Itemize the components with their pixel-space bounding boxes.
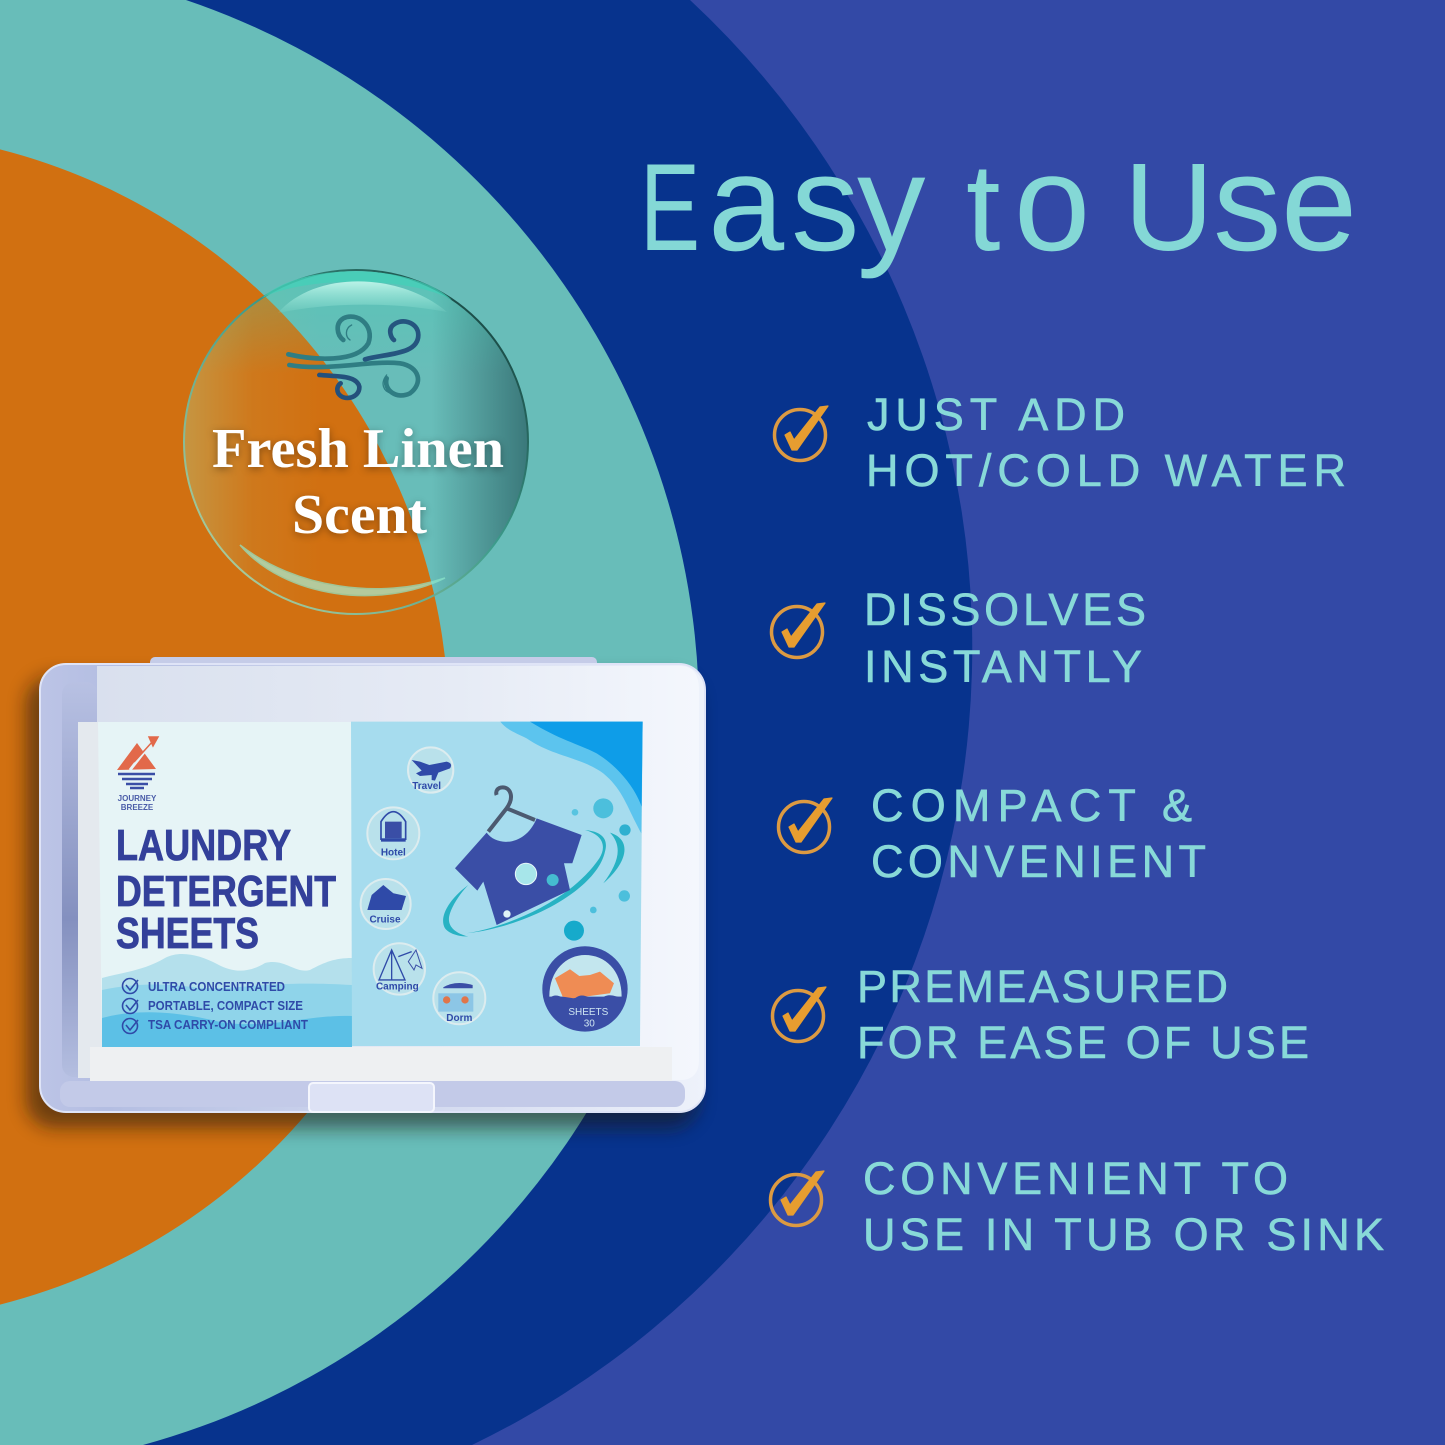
icon: travel	[408, 747, 453, 793]
item text: CONVENIENT	[871, 836, 1206, 887]
product name: DETERGENT	[116, 867, 336, 916]
badge text	[212, 418, 504, 546]
case bottom edge	[60, 1081, 685, 1107]
title: o	[1014, 127, 1090, 280]
case shell	[40, 664, 705, 1112]
brand logo: BREEZE	[121, 803, 154, 812]
bubble body	[184, 270, 528, 614]
case top lip	[150, 657, 597, 671]
product name: LAUNDRY	[116, 821, 291, 870]
shirt	[455, 818, 582, 925]
title: y	[857, 127, 926, 280]
icon: check	[770, 1171, 824, 1226]
item text: HOT/COLD WATER	[866, 445, 1346, 496]
feature checks	[122, 978, 138, 1034]
product: plastic case with laundry detergent sheets	[26, 657, 705, 1128]
list item: dissolves instantly	[772, 584, 1146, 692]
title: s	[791, 127, 860, 280]
icon: check	[774, 406, 828, 460]
item text	[871, 780, 1206, 887]
title: e	[1281, 127, 1357, 280]
white sheets	[97, 666, 699, 1080]
list item: compact and convenient	[778, 780, 1206, 887]
hanger	[488, 787, 535, 832]
product name: SHEETS	[116, 909, 259, 958]
list item: premeasured	[772, 961, 1309, 1068]
label left panel	[98, 722, 352, 1047]
brand logo: JOURNEY	[118, 794, 157, 803]
corner wave light	[500, 722, 643, 833]
list item: just add water	[774, 389, 1346, 496]
label white background	[98, 722, 352, 1047]
sheet edge left	[78, 722, 102, 1078]
wave deep	[102, 1012, 352, 1047]
label right panel	[351, 722, 643, 1046]
title: a	[708, 127, 785, 280]
case clasp	[309, 1083, 434, 1112]
item text: INSTANTLY	[864, 641, 1142, 692]
sheet count seal: SHEETS	[568, 1007, 609, 1018]
bubble bottom crescent	[240, 545, 445, 596]
icon: dorm	[433, 972, 485, 1024]
icon: hotel	[367, 807, 419, 859]
sheet count seal: 30	[584, 1018, 595, 1029]
background arc: orange	[0, 149, 449, 1305]
item text: JUST ADD	[867, 389, 1125, 440]
feature text	[148, 980, 308, 1032]
icon: wind swirls	[288, 317, 418, 398]
icon: check	[772, 987, 826, 1042]
icon: check	[778, 798, 832, 852]
icon: dorm: Dorm	[446, 1013, 472, 1024]
icon: check	[772, 603, 825, 658]
badge text: Fresh Linen	[212, 418, 504, 480]
feature text: TSA CARRY-ON COMPLIANT	[148, 1018, 308, 1032]
icon: camping: Camping	[376, 981, 419, 992]
bubble top rim	[262, 271, 452, 300]
title: U	[1124, 139, 1214, 277]
item text: DISSOLVES	[864, 584, 1146, 635]
bubble top tint	[185, 271, 527, 613]
bubble top gloss	[278, 281, 447, 313]
badge: fresh linen scent glass bubble	[184, 270, 528, 614]
title: s	[1213, 127, 1282, 280]
item text: PREMEASURED	[857, 961, 1228, 1012]
background arc: navy	[0, 0, 972, 1445]
title: t	[966, 139, 1000, 277]
case shadow	[26, 676, 698, 1128]
orbit swoosh	[443, 830, 624, 937]
wave mid	[102, 984, 352, 1047]
icon: cruise: Cruise	[369, 915, 401, 926]
item text: FOR EASE OF USE	[857, 1017, 1309, 1068]
feature text: PORTABLE, COMPACT SIZE	[148, 999, 303, 1013]
wave light	[102, 954, 352, 1047]
sheet count seal	[542, 946, 628, 1032]
shirt bubbles	[503, 863, 559, 918]
icon: travel: Travel	[412, 781, 441, 792]
icon: hotel: Hotel	[381, 848, 406, 859]
icon: cruise	[361, 879, 411, 929]
background arc: teal	[0, 0, 699, 1445]
feature text: ULTRA CONCENTRATED	[148, 980, 285, 994]
item text	[866, 389, 1346, 496]
item text: USE IN TUB OR SINK	[863, 1209, 1384, 1260]
item text: CONVENIENT TO	[863, 1153, 1288, 1204]
item text	[864, 584, 1146, 692]
badge text: Scent	[292, 484, 427, 546]
title: E	[640, 139, 700, 277]
panel background	[351, 722, 643, 1046]
floating bubbles	[564, 798, 631, 941]
icon: camping	[374, 943, 425, 995]
product name	[116, 821, 336, 958]
sheet stack bottom	[90, 1047, 672, 1081]
item text: COMPACT &	[871, 780, 1192, 831]
list item: tub or sink	[770, 1153, 1384, 1260]
item text	[863, 1153, 1384, 1260]
item text	[857, 961, 1309, 1068]
case left gutter	[62, 682, 98, 1077]
brand logo	[117, 737, 158, 812]
corner wave deep	[530, 722, 643, 807]
